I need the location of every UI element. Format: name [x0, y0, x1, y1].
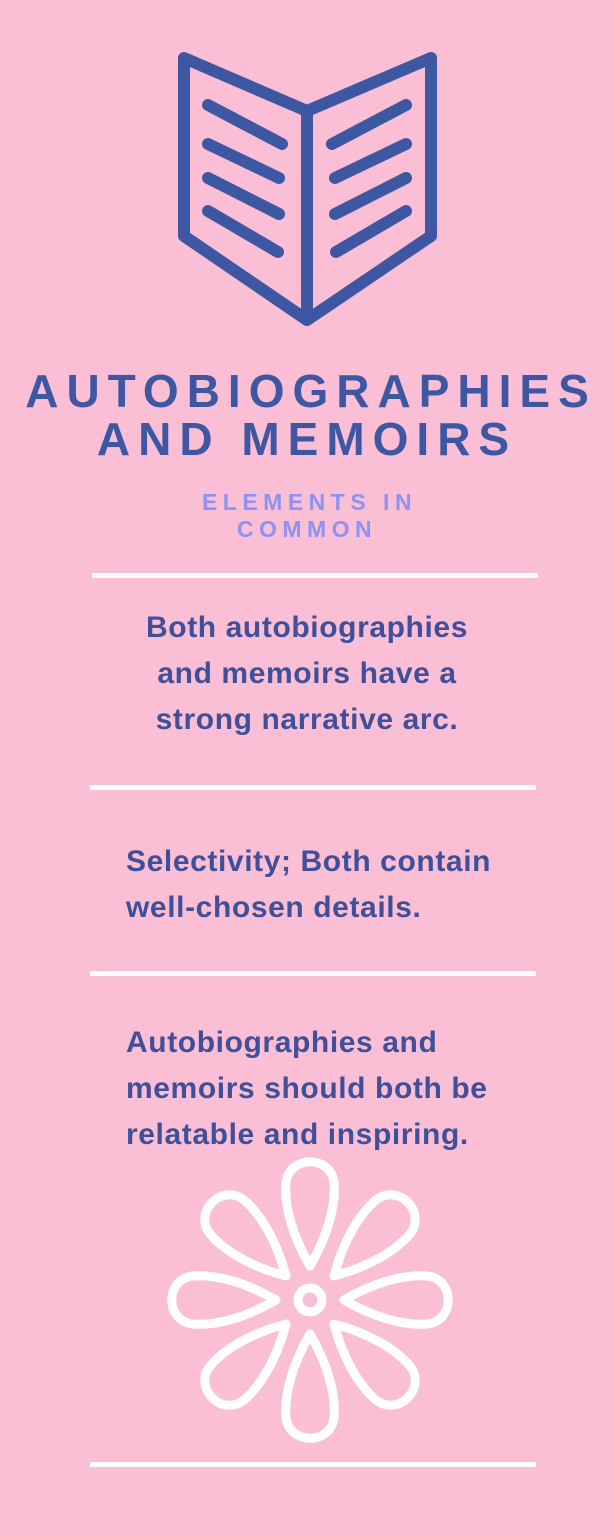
icon: flower — [167, 1157, 453, 1443]
text block 3: Autobiographies and — [126, 1026, 437, 1059]
text block 1: strong narrative arc. — [156, 703, 458, 736]
icon: open book — [178, 52, 437, 326]
text block 3: relatable and inspiring. — [126, 1118, 469, 1151]
text block 1: Both autobiographies — [146, 611, 468, 644]
text block 1: and memoirs have a — [157, 657, 457, 690]
title: AUTOBIOGRAPHIES — [25, 365, 597, 417]
text block 2: Selectivity; Both contain — [126, 845, 491, 878]
text block 2 — [126, 845, 491, 924]
text block 2: well-chosen details. — [126, 891, 421, 924]
title: AND MEMOIRS — [97, 413, 517, 465]
title — [25, 365, 597, 465]
subtitle: ELEMENTS IN — [202, 489, 417, 515]
subtitle — [202, 489, 417, 542]
text block 3 — [126, 1026, 488, 1151]
subtitle: COMMON — [237, 516, 377, 542]
text block 3: memoirs should both be — [126, 1072, 488, 1105]
text block 1 — [146, 611, 468, 736]
